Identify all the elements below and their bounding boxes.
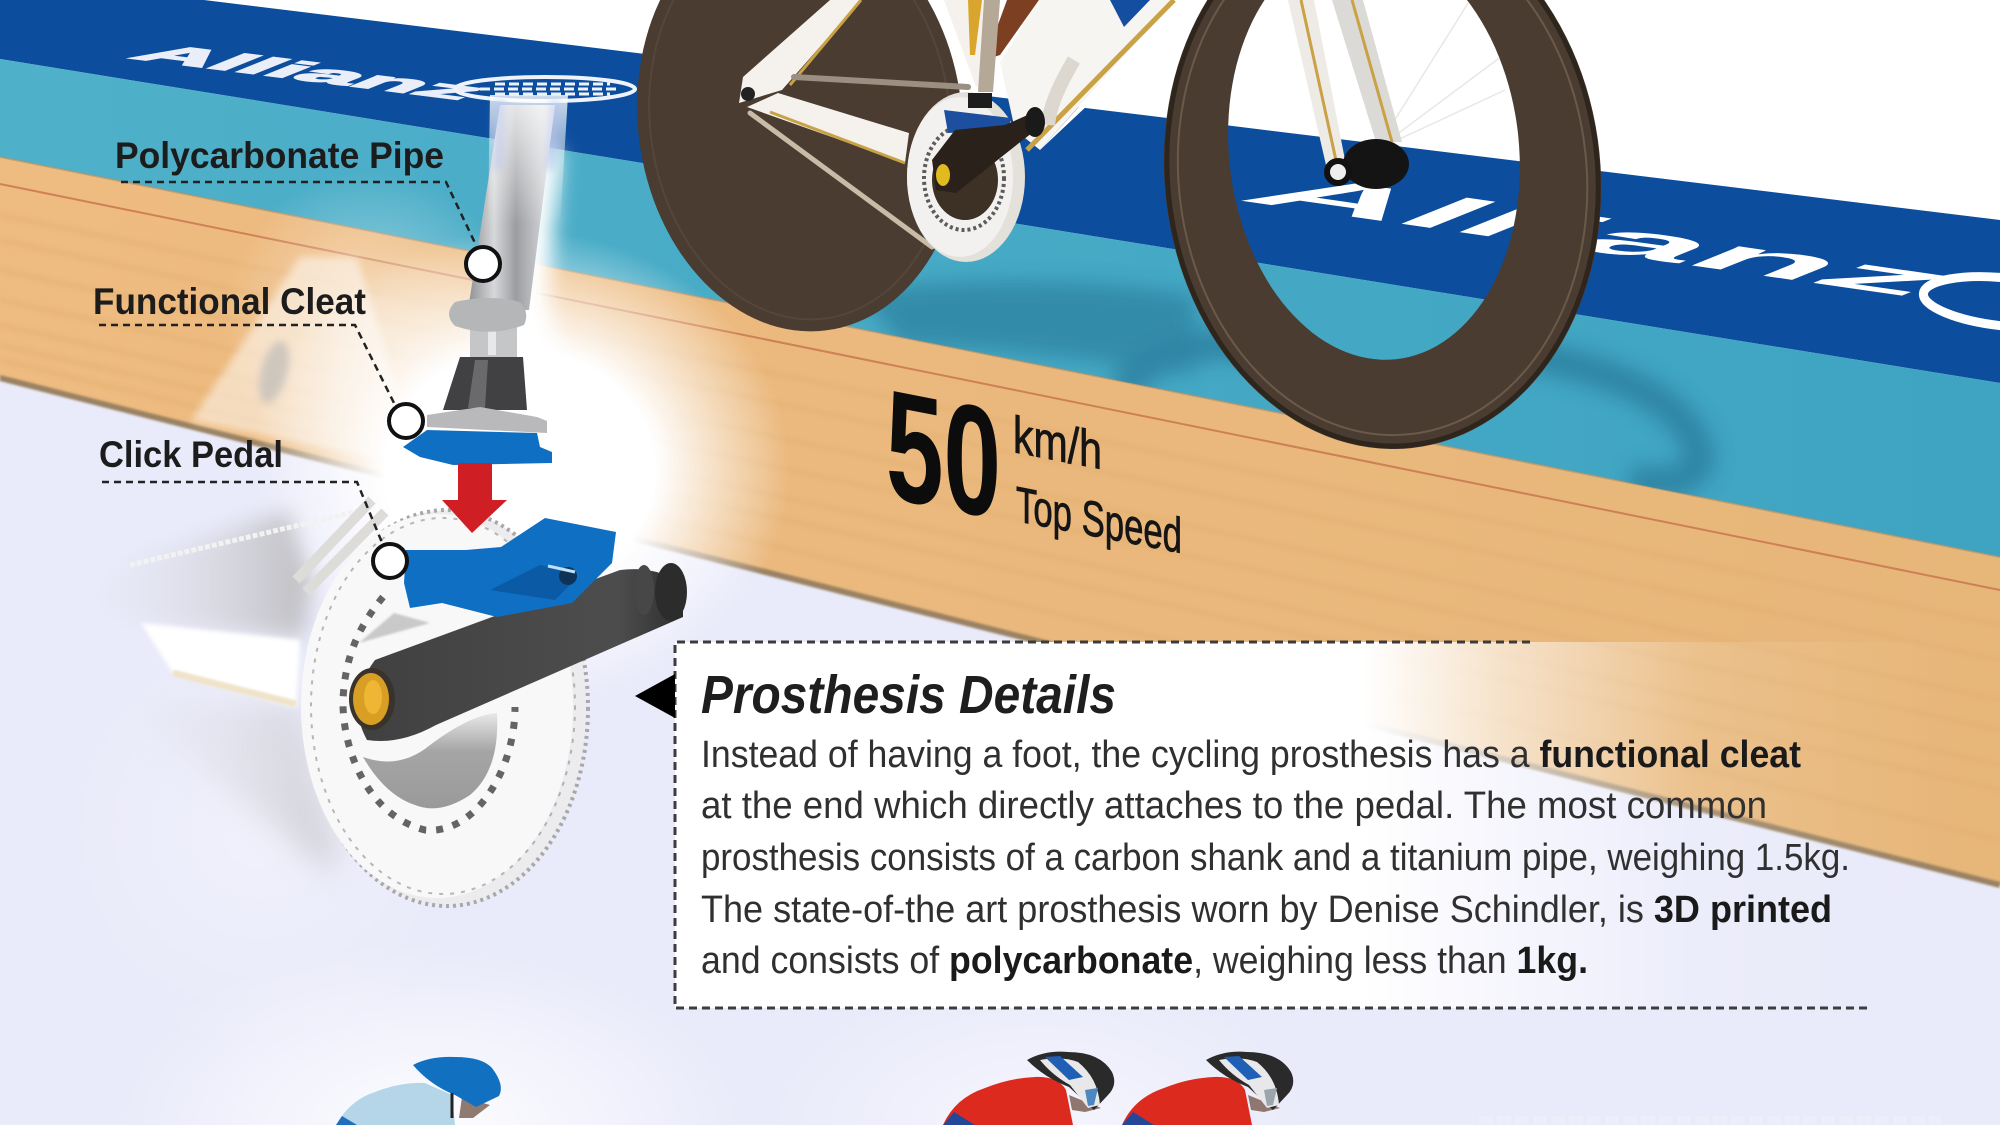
chainring bbox=[907, 92, 1025, 262]
top speed figure bbox=[886, 356, 1182, 564]
label: functional cleat bbox=[93, 281, 395, 405]
front fork and hub bbox=[1288, 0, 1510, 189]
frame: seat tube bbox=[944, 0, 1000, 87]
polycarbonate pipe bbox=[468, 105, 555, 310]
red arrow bbox=[442, 463, 507, 533]
frame: down tube bbox=[1000, 0, 1174, 150]
hex plate bbox=[427, 407, 547, 433]
Allianz logo ring, right bbox=[1921, 270, 2000, 334]
frame: brace and chain bbox=[741, 77, 968, 247]
label: click pedal: Click Pedal bbox=[99, 434, 283, 475]
label: click pedal bbox=[99, 434, 383, 545]
bicycle bbox=[613, 0, 1628, 471]
white glow around prosthesis bbox=[220, 150, 790, 710]
body text: and consists of polycarbonate, weighing less than 1kg. bbox=[701, 940, 1588, 982]
panel background bbox=[675, 642, 1965, 1008]
prosthesis pipe assembly bbox=[403, 95, 568, 533]
crank arm bbox=[349, 563, 687, 741]
body text: The state-of-the art prosthesis worn by Denise Schindler, is 3D printed bbox=[701, 889, 1832, 931]
pointer arrow bbox=[635, 674, 675, 718]
track: wood surface bbox=[0, 157, 2000, 885]
heading: Prosthesis Details bbox=[701, 665, 1116, 725]
pipe top fade bbox=[488, 95, 568, 225]
track: blue advertising band bbox=[0, 0, 2000, 383]
crank with cleat bbox=[932, 93, 1045, 193]
Allianz lettering, right: Allianz bbox=[1217, 167, 1991, 304]
rider: red jersey, second bbox=[1122, 1052, 1293, 1125]
panel: prosthesis details bbox=[635, 642, 1965, 1008]
track: teal band bbox=[0, 59, 2000, 557]
bike shadow on teal band bbox=[860, 281, 1700, 482]
label: functional cleat: Functional Cleat bbox=[93, 281, 366, 322]
Allianz lettering, left: Allianz bbox=[117, 40, 505, 104]
click pedal bbox=[404, 518, 616, 617]
Allianz logo ring, left bbox=[455, 77, 635, 101]
frame: blue logo diamond bbox=[1110, 0, 1150, 27]
panel dashed border bbox=[675, 642, 1870, 1008]
front wheel bbox=[1137, 0, 1628, 471]
ghosted bicycle frame behind prosthesis bbox=[98, 257, 395, 877]
label: polycarbonate pipe: Polycarbonate Pipe bbox=[115, 135, 444, 176]
pipe collar bbox=[449, 298, 526, 332]
callout labels bbox=[93, 135, 500, 578]
black cone bbox=[443, 357, 527, 410]
soft glow behind riders bbox=[30, 600, 1340, 1125]
label: polycarbonate pipe bbox=[115, 135, 475, 243]
rear disc wheel bbox=[613, 0, 987, 350]
frame: seat stay bbox=[739, 0, 861, 103]
rider: red jersey, first bbox=[943, 1052, 1114, 1125]
top speed figure: Top Speed bbox=[1016, 475, 1182, 564]
pipe neck bbox=[470, 320, 517, 357]
top speed figure: 50 bbox=[886, 356, 1001, 553]
frame: chain stay bbox=[747, 93, 909, 163]
chainring bolt holes bbox=[343, 597, 515, 830]
marker: cleat bbox=[389, 404, 423, 438]
white upper area behind the track bbox=[0, 0, 2000, 400]
velodrome track bbox=[0, 0, 2000, 885]
body text: at the end which directly attaches to the pedal. The most common bbox=[701, 785, 1767, 827]
body text: Instead of having a foot, the cycling prosthesis has a functional cleat bbox=[701, 734, 1801, 776]
top speed figure: km/h bbox=[1013, 405, 1102, 481]
functional cleat bbox=[403, 430, 552, 465]
body text bbox=[701, 734, 1850, 982]
rider leg bbox=[985, 0, 1039, 60]
body text: prosthesis consists of a carbon shank and a titanium pipe, weighing 1.5kg. bbox=[701, 837, 1850, 879]
marker: pipe bbox=[466, 247, 500, 281]
chainring disc bbox=[301, 510, 588, 906]
marker: pedal bbox=[373, 544, 407, 578]
rider: blue helmet bbox=[336, 1057, 501, 1125]
prosthesis chainring and crank detail bbox=[301, 510, 687, 906]
chainring inner cut-out bbox=[363, 713, 497, 808]
